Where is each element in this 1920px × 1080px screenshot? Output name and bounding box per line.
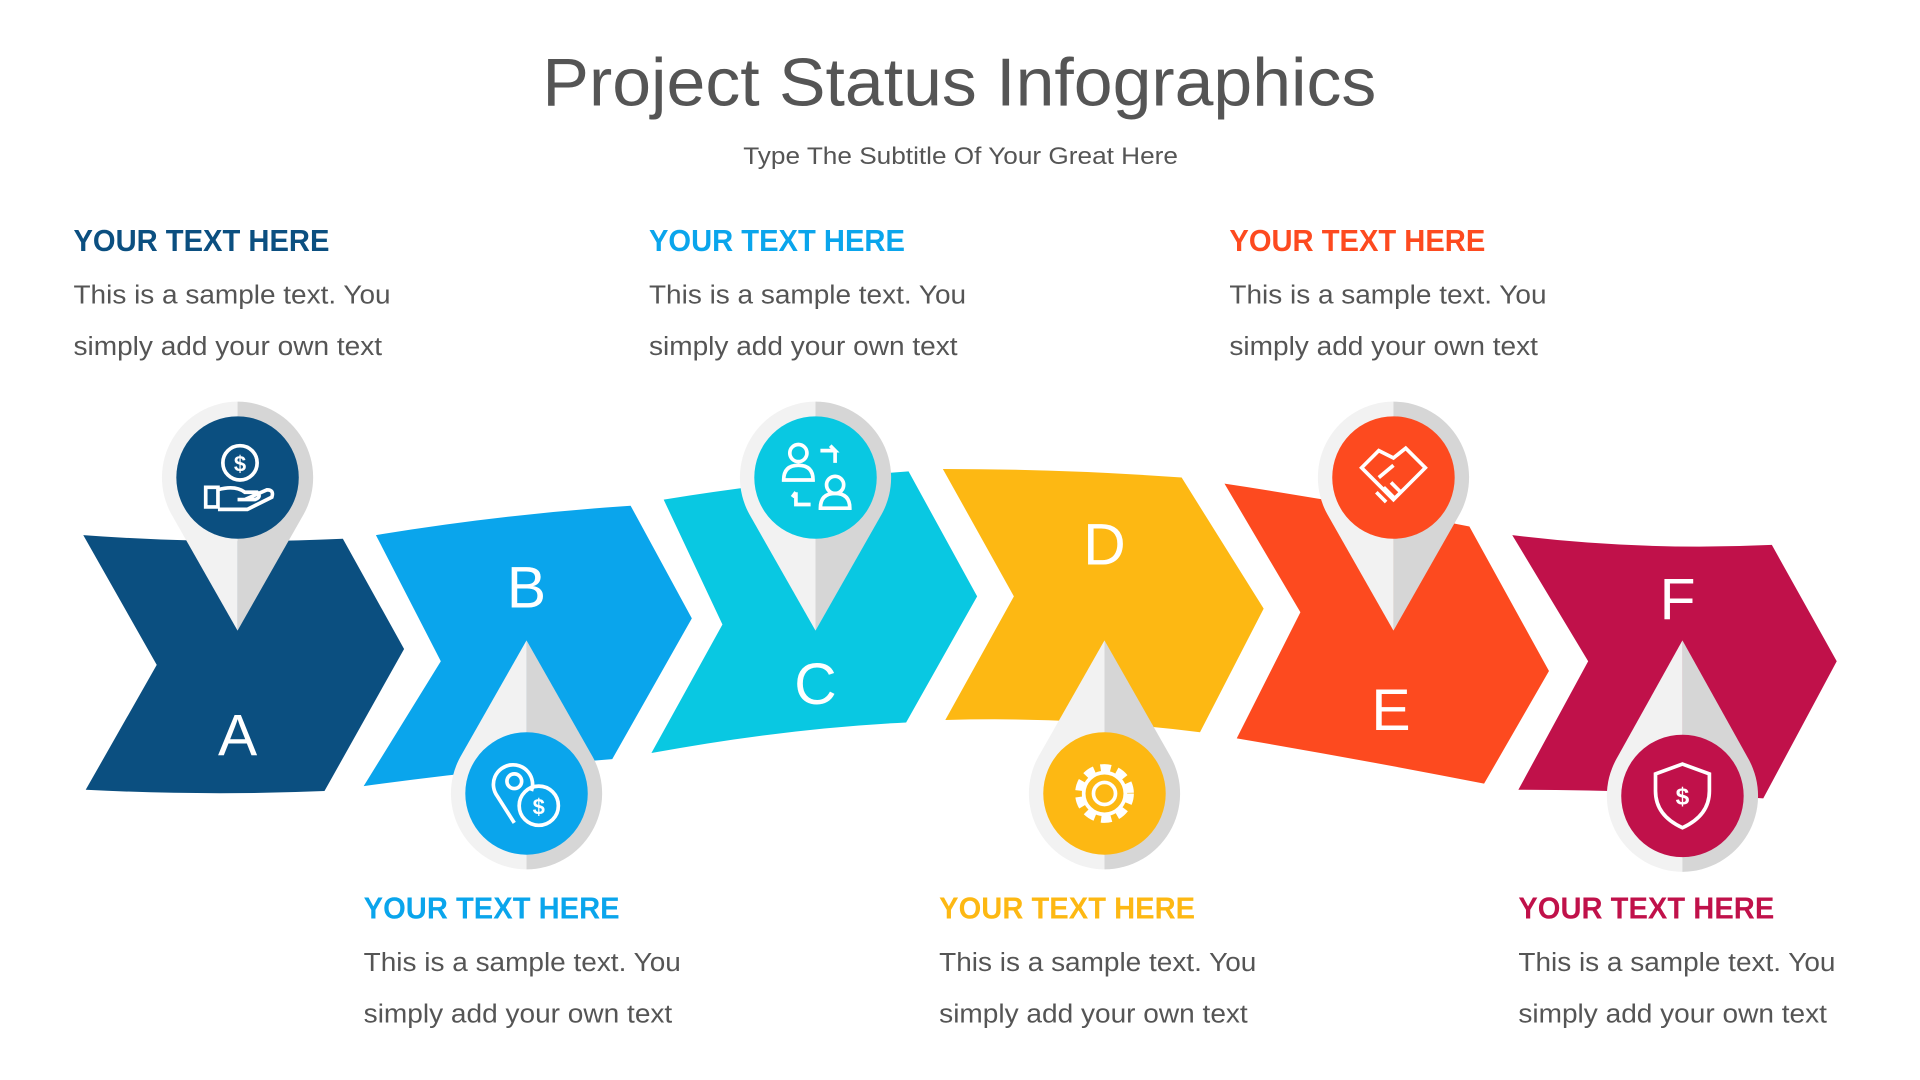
pin C: people exchange <box>740 402 891 631</box>
pin B: location coin <box>451 640 602 869</box>
text block F: This is a sample text. You <box>1518 949 1836 977</box>
arrow B <box>364 506 692 786</box>
text block D <box>939 891 1256 1028</box>
pin E: handshake <box>1318 402 1469 631</box>
pin F: shield: $ <box>1676 783 1690 810</box>
text block E: YOUR TEXT HERE <box>1229 224 1485 258</box>
pin A: money hand <box>162 402 313 631</box>
text block F: YOUR TEXT HERE <box>1518 891 1774 925</box>
arrow D: D <box>1083 512 1126 577</box>
pin F: shield <box>1607 640 1758 872</box>
text block E: simply add your own text <box>1229 333 1538 361</box>
arrow A <box>83 535 404 793</box>
text block C: simply add your own text <box>649 333 958 361</box>
arrow F <box>1512 535 1837 798</box>
text block D: simply add your own text <box>939 1000 1248 1028</box>
text block A: This is a sample text. You <box>73 282 391 310</box>
text block A <box>73 224 391 361</box>
arrow C <box>651 471 977 753</box>
pin B: location coin: $ <box>533 794 545 819</box>
arrow E <box>1224 484 1549 784</box>
text block B <box>364 891 681 1028</box>
text block A: YOUR TEXT HERE <box>73 224 329 258</box>
text block C: This is a sample text. You <box>649 282 966 310</box>
text block D: YOUR TEXT HERE <box>939 891 1195 925</box>
arrow E: E <box>1371 678 1411 743</box>
arrow C: C <box>794 652 837 717</box>
arrow B: B <box>507 555 546 620</box>
text block E <box>1229 224 1547 361</box>
text block D: This is a sample text. You <box>939 949 1256 977</box>
text block B: This is a sample text. You <box>364 949 681 977</box>
text block C: YOUR TEXT HERE <box>649 224 905 258</box>
arrow A: A <box>218 704 258 769</box>
pin A: money hand: $ <box>234 451 246 476</box>
arrow D <box>943 469 1264 732</box>
title: Project Status Infographics <box>542 45 1376 120</box>
text block C <box>649 224 966 361</box>
text block B: simply add your own text <box>364 1000 672 1028</box>
text block F: simply add your own text <box>1518 1000 1827 1028</box>
text block B: YOUR TEXT HERE <box>364 891 620 925</box>
pin D: gear <box>1029 640 1180 869</box>
text block F <box>1518 891 1836 1028</box>
text block A: simply add your own text <box>73 333 382 361</box>
text block E: This is a sample text. You <box>1229 282 1547 310</box>
subtitle: Type The Subtitle Of Your Great Here <box>743 143 1178 170</box>
arrow F: F <box>1660 568 1696 633</box>
